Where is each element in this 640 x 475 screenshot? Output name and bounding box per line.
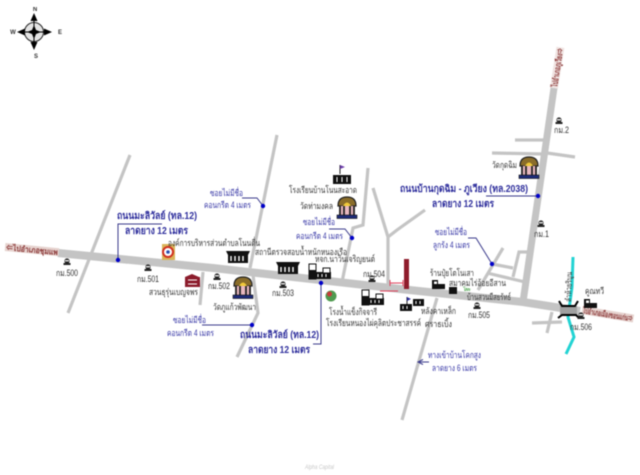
callout: Highway 12 west: ถนนมะลิวัลย์ (ทล.12) (117, 210, 197, 222)
icon: fertilizer shop (432, 280, 445, 289)
km 504 (363, 269, 385, 282)
callout: Highway 2038: ถนนบ้านกุดฉิม - ภูเวียง (ทล.2038) (400, 183, 528, 196)
compass: E (58, 30, 62, 36)
callout: Highway 12 east: ลาดยาง 12 เมตร (248, 345, 311, 356)
callout: Highway 12 east: ถนนมะลิวัลย์ (ทล.12) (240, 329, 319, 341)
icon: SAO hall (226, 251, 250, 263)
callout: laterite soi: ซอยไม่มีชื่อ (435, 225, 467, 237)
river (566, 257, 574, 354)
callout: unnamed soi 2 (296, 215, 354, 241)
callout: unnamed soi 1: ซอยไม่มีชื่อ (210, 186, 243, 198)
km 500: กม.500 (56, 268, 78, 278)
label: Isan sugarcane association: สมาคมไร่อ้อยอีสาน (449, 278, 506, 288)
callout: Ban Khok Sung road: ทางเข้าบ้านโคกสูง (428, 350, 481, 361)
label: dealership: หจก.นาวินเจริญยนต์ (315, 253, 375, 264)
icon: Wat Kut Chim (519, 157, 539, 178)
icon: association (449, 287, 457, 294)
label: green tag: โลหะ (463, 286, 471, 293)
direction label: north (549, 47, 566, 89)
icon: SAO logo (162, 244, 175, 260)
km 502: กม.502 (208, 281, 230, 291)
river label: ลำห้วยริบูน (564, 271, 575, 302)
label: fertilizer shop: ร้านปุ๋ยโตโนเสา (430, 268, 474, 279)
callout: Ban Khok Sung road (418, 350, 481, 373)
compass: N (33, 7, 37, 13)
north road (523, 88, 554, 302)
callout: Highway 12 east (240, 281, 323, 356)
icon: Khun Thawi (584, 299, 597, 308)
km 2 (554, 117, 569, 135)
label: Wat Phu Kaeo: วัดภูแก้วพัฒนา (213, 302, 256, 313)
label: Khun Thawi: คูณทวี (585, 286, 604, 297)
km 505 (468, 302, 490, 320)
km 506 (570, 312, 592, 332)
callout: unnamed soi 2: คอนกรีต 4 เมตร (296, 231, 343, 241)
compass: S (34, 54, 38, 60)
callout: Highway 2038: ลาดยาง 12 เมตร (432, 199, 495, 210)
icon: red building (185, 274, 200, 287)
callout: unnamed soi 3: ซอยไม่มีชื่อ (173, 313, 206, 325)
icon: red arrows (380, 280, 403, 291)
direction label: east (581, 305, 634, 324)
callout: Highway 12 west: ลาดยาง 12 เมตร (125, 226, 189, 237)
compass: W (10, 30, 16, 36)
place labels (149, 160, 604, 471)
km 503: กม.503 (272, 288, 294, 298)
callout: Ban Khok Sung road: ลาดยาง 6 เมตร (432, 363, 477, 373)
km markers (56, 117, 592, 332)
callout: laterite soi (433, 225, 494, 266)
icon: green logo (326, 290, 336, 302)
km 500 (56, 258, 78, 278)
callout: laterite soi: ลูกรัง 4 เมตร (433, 240, 470, 251)
callout: unnamed soi 3 (167, 313, 254, 338)
label: steel roof: หลังคาเหล็ก (421, 304, 456, 316)
km 1 (534, 220, 549, 239)
callout: unnamed soi 2: ซอยไม่มีชื่อ (303, 215, 335, 227)
label: Wat Kut Chim: วัดกุดฉิม (492, 160, 517, 171)
label: Ban Suan: บ้านสวนมีสยรัทธ์ (467, 291, 511, 302)
icon: dealership factory (309, 264, 331, 279)
km 503 (272, 281, 294, 298)
direction label: west: ⇐ไปอำเภอชุมแพ (6, 242, 58, 258)
compass (10, 7, 62, 60)
km 501 (137, 264, 159, 284)
icon: school north (333, 165, 351, 184)
label: Nong Phai school: โรงเรียนหนองไผ่คุลิตประชาสรรค์ (326, 317, 421, 329)
label: Wat Tha Mongkhon: วัดท่ามงคล (300, 201, 333, 211)
km 502 (208, 273, 230, 291)
km 501: กม.501 (137, 274, 159, 284)
label: ice factory: โรงน้ำแข็งกิจจารี (329, 305, 377, 317)
label: SAO: องค์การบริหารส่วนตำบลโนนตื่น (168, 236, 260, 248)
label: Ban Non Sa-at school: โรงเรียนบ้านโนนสะอาด (289, 185, 357, 195)
icon: red tower (404, 259, 409, 289)
icon: Wat Tha Mongkhon (337, 197, 357, 218)
main road (58, 253, 580, 311)
bridge (558, 301, 579, 318)
roads (58, 88, 580, 420)
callout: unnamed soi 1: คอนกรีต 4 เมตร (204, 200, 251, 210)
label: weighing station: สถานีตรวจสอบน้ำหนักหนองเรือ (255, 245, 347, 257)
callout: Highway 12 west (116, 210, 197, 262)
watermark: Alpha Capital (304, 465, 335, 471)
callout: Highway 2038 (400, 183, 540, 210)
km 2: กม.2 (554, 125, 569, 135)
icon: school south (400, 297, 424, 311)
km 504: กม.504 (363, 269, 385, 279)
label: Saratoeng: ศราธเบิ้ง (425, 317, 452, 329)
callout: unnamed soi 3: คอนกรีต 4 เมตร (167, 328, 214, 338)
direction label: north: ไปอำเภอภูเวียง⇒ (549, 48, 566, 88)
icon: Wat Phu Kaeo (233, 277, 253, 298)
side roads (68, 135, 575, 420)
label: garden: สวนธุรุ่นเบญจพร (149, 287, 198, 298)
callout: unnamed soi 1 (204, 186, 265, 210)
icon: ice factory (362, 290, 384, 305)
km 1: กม.1 (534, 229, 549, 239)
km 505: กม.505 (468, 310, 490, 320)
icon: weighing station (276, 262, 300, 274)
km 506: กม.506 (570, 322, 592, 332)
